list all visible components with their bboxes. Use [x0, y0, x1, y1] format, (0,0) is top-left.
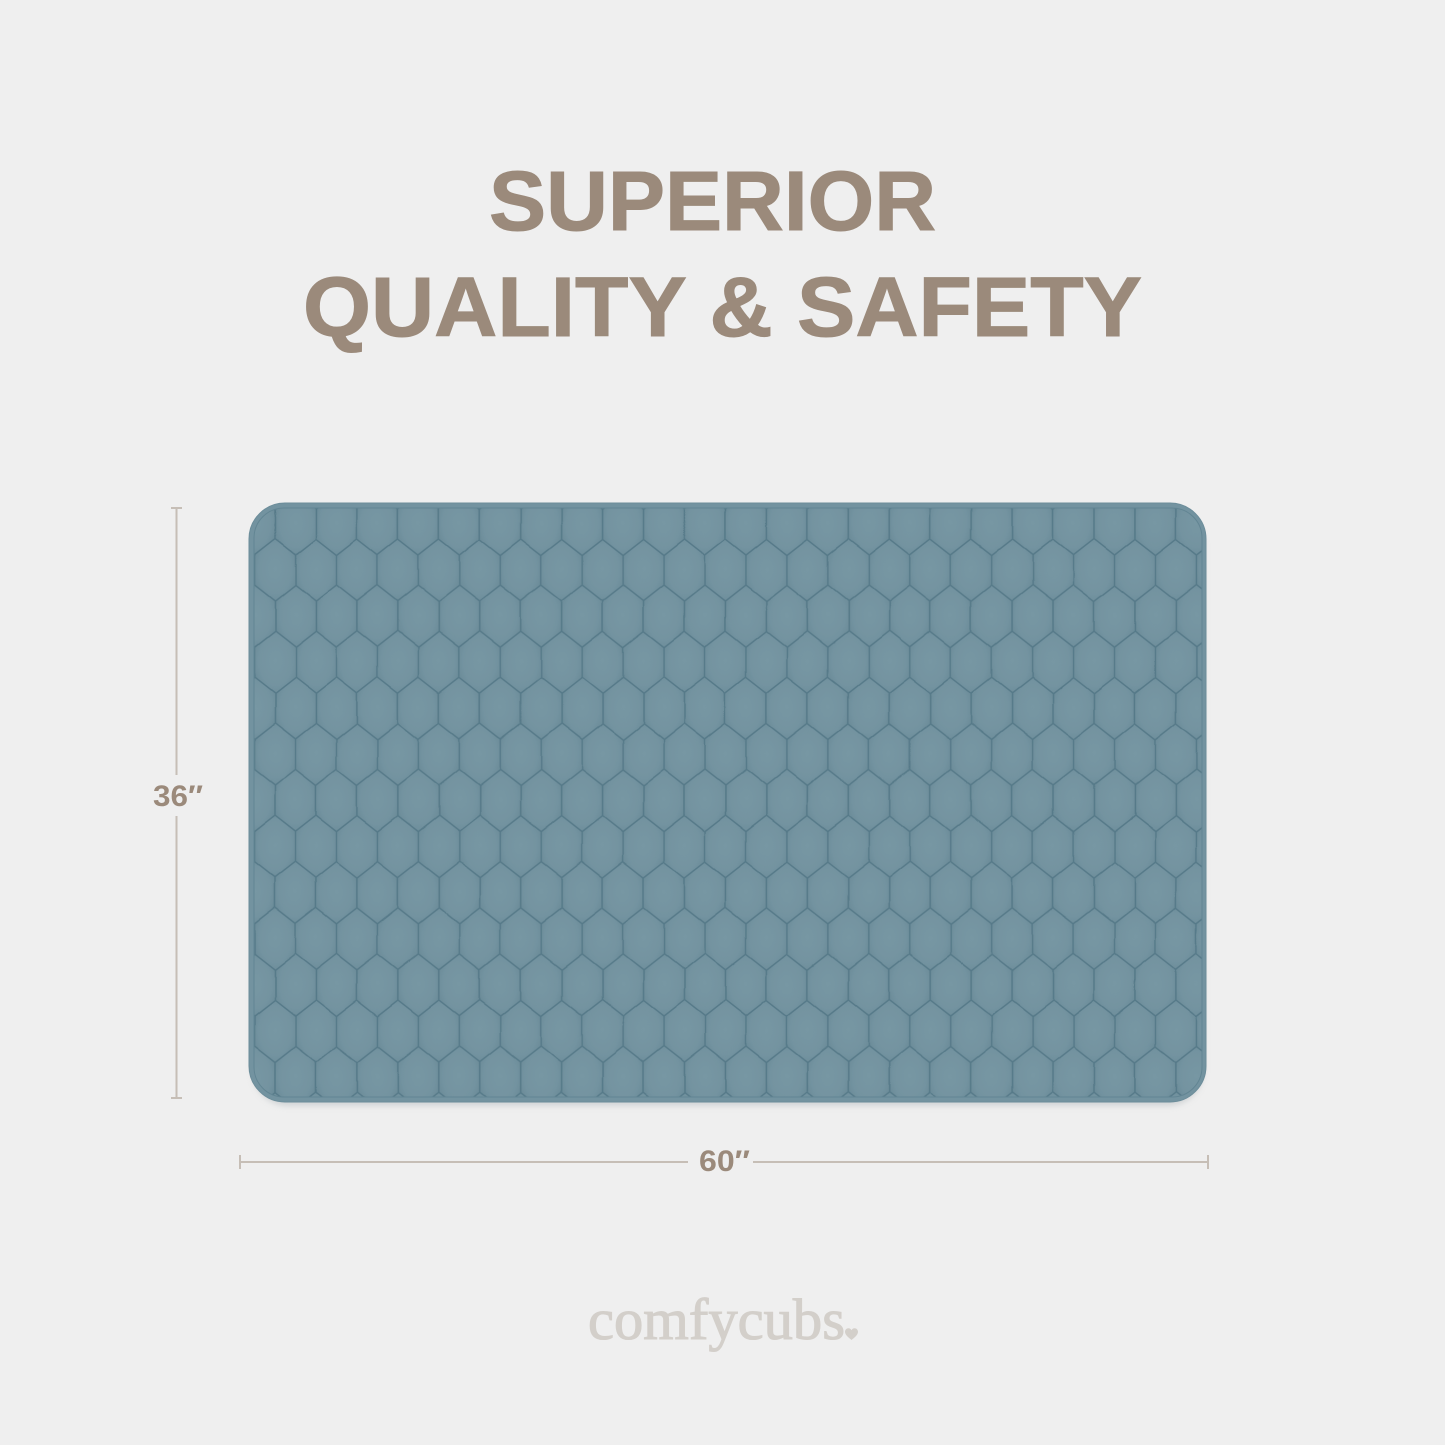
honeycomb quilting: [240, 495, 1215, 1110]
infographic canvas: [154, 170, 1209, 1352]
title line 2: QUALITY & SAFETY: [303, 260, 1142, 354]
width dimension: 60 inches: [240, 1145, 1208, 1178]
height label: 36″: [153, 780, 203, 813]
mat edge binding: [249, 503, 1206, 1102]
title line 1: SUPERIOR: [489, 154, 936, 248]
brand wordmark: comfycubs: [588, 1287, 845, 1352]
height dimension: 36 inches: [153, 508, 203, 1098]
mat shadow: [252, 510, 1204, 1106]
quilted mat product image: [240, 495, 1215, 1110]
brand logo: [588, 1287, 858, 1352]
height rule: [171, 508, 182, 1098]
width label: 60″: [699, 1145, 750, 1178]
inner seam: [254, 508, 1202, 1097]
width rule: [240, 1155, 1208, 1169]
icon: heart: [845, 1328, 858, 1340]
title: [303, 154, 1142, 354]
